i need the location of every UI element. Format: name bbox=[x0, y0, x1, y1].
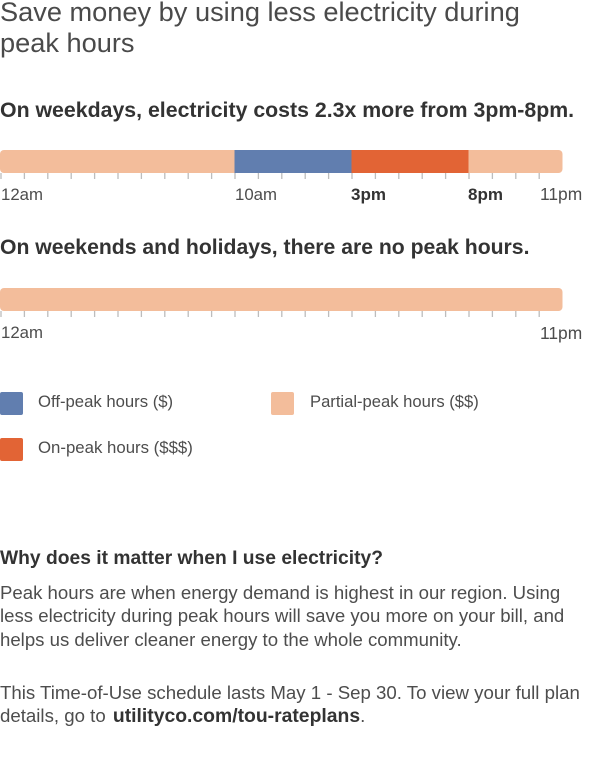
paragraph: schedule details: details, go to utilityco.com/tou-rateplans. bbox=[0, 705, 365, 727]
label: 8pm: 8pm bbox=[468, 185, 503, 204]
heading: weekdays: On weekdays, electricity costs 2.3x more from 3pm-8pm. bbox=[0, 98, 574, 122]
segment: partial-peak, all day bbox=[0, 288, 562, 311]
title: peak hours bbox=[0, 27, 135, 58]
label: 12am: 12am bbox=[1, 323, 43, 342]
segment: partial-peak, overnight bbox=[0, 150, 234, 173]
label: 3pm: 3pm bbox=[351, 185, 386, 204]
paragraph: peak hours explanation: less electricity during peak hours will save you more on your bill, and bbox=[0, 605, 564, 626]
legend bbox=[0, 392, 479, 461]
label: 10am: 10am bbox=[235, 185, 277, 204]
legend label: off-peak: Off-peak hours ($) bbox=[38, 392, 173, 411]
paragraph: peak hours explanation: helps us deliver cleaner energy to the whole community. bbox=[0, 628, 462, 650]
paragraph: peak hours explanation bbox=[0, 582, 564, 650]
label: 11pm: 11pm bbox=[540, 323, 582, 343]
hour ticks bbox=[1, 311, 539, 317]
label: 11pm: 11pm bbox=[540, 184, 582, 204]
label: 12am: 12am bbox=[1, 185, 43, 204]
legend swatch: partial-peak bbox=[271, 392, 294, 415]
weekend timeline bar bbox=[0, 288, 562, 317]
segment: partial-peak, evening bbox=[468, 150, 562, 173]
segment: off-peak bbox=[234, 150, 352, 173]
hour ticks bbox=[1, 173, 539, 179]
subheading: why it matters: Why does it matter when I use electricity? bbox=[0, 548, 383, 569]
legend swatch: on-peak bbox=[0, 438, 23, 461]
segment: on-peak bbox=[352, 150, 468, 173]
paragraph: schedule details: This Time-of-Use schedule lasts May 1 - Sep 30. To view your full plan bbox=[0, 682, 580, 703]
heading: weekends: On weekends and holidays, there are no peak hours. bbox=[0, 236, 529, 259]
weekday timeline bar bbox=[0, 150, 562, 179]
paragraph: schedule details bbox=[0, 682, 580, 727]
legend swatch: off-peak bbox=[0, 392, 23, 415]
paragraph: peak hours explanation: Peak hours are when energy demand is highest in our region. Using bbox=[0, 582, 560, 603]
title bbox=[0, 0, 520, 58]
legend label: partial-peak: Partial-peak hours ($$) bbox=[310, 392, 479, 411]
legend label: on-peak: On-peak hours ($$$) bbox=[38, 438, 193, 457]
